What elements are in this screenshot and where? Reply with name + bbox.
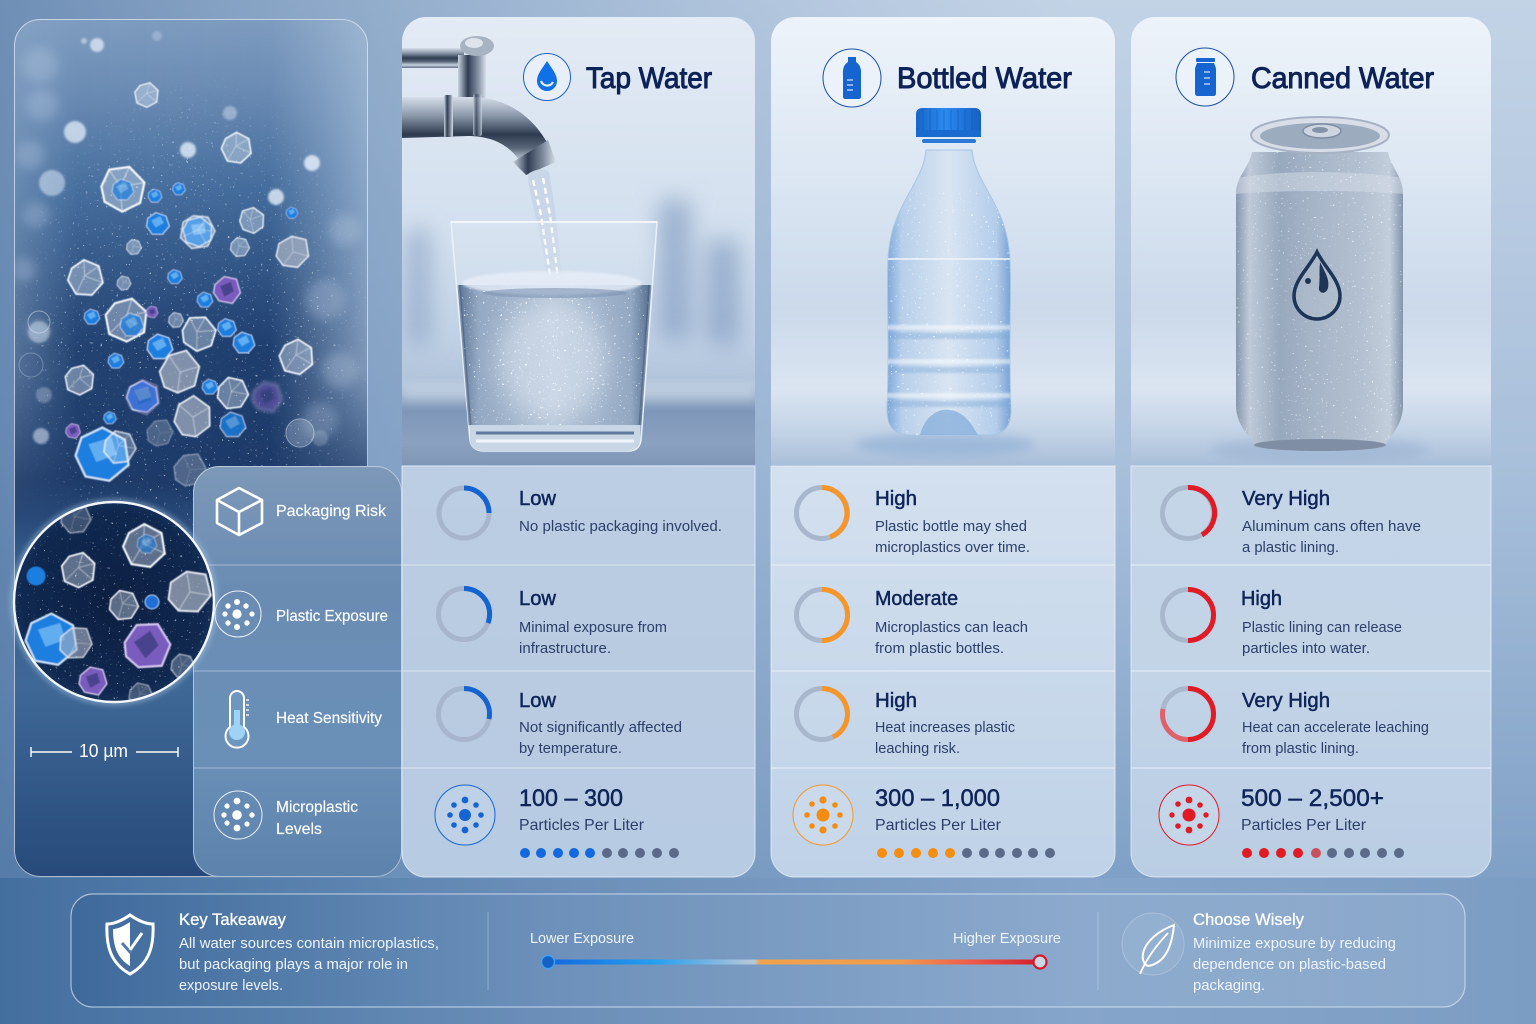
tap: packaging risk xyxy=(439,488,722,538)
panel: microplastic particles xyxy=(12,19,368,877)
tap: plastic exposure: infrastructure. xyxy=(519,640,611,657)
tap: plastic exposure xyxy=(438,588,667,657)
tap: packaging risk: Low xyxy=(519,488,557,510)
tap: heat sensitivity: Low xyxy=(519,690,557,712)
canned: plastic exposure: Plastic lining can release xyxy=(1242,619,1402,636)
icon: shield xyxy=(107,915,153,974)
label: packaging risk: Packaging Risk xyxy=(276,503,387,520)
tap: heat sensitivity xyxy=(438,688,682,757)
canned: heat sensitivity: from plastic lining. xyxy=(1242,740,1359,757)
choose wisely: dependence on plastic-based xyxy=(1193,956,1386,973)
choose wisely: Minimize exposure by reducing xyxy=(1193,935,1396,952)
scale bar: 10 micrometres: 10 µm xyxy=(79,741,128,761)
canned: microplastic levels xyxy=(1159,785,1404,858)
bottled: heat sensitivity xyxy=(796,688,1015,757)
bottled: microplastic levels: 300 – 1,000 xyxy=(875,785,1000,812)
label: packaging risk xyxy=(217,488,387,535)
label: microplastic levels xyxy=(214,791,358,839)
exposure gradient scale xyxy=(530,930,1061,968)
key takeaway xyxy=(107,910,439,994)
tap: heat sensitivity: by temperature. xyxy=(519,740,622,757)
canned: packaging risk: Aluminum cans often have xyxy=(1242,518,1421,535)
table column: bottled water xyxy=(771,466,1115,877)
bottled: heat sensitivity: Heat increases plastic xyxy=(875,719,1015,736)
bottled: microplastic levels xyxy=(793,785,1055,858)
canned: packaging risk: Very High xyxy=(1242,488,1330,510)
bottled: plastic exposure xyxy=(796,588,1028,657)
canned: microplastic levels: Particles Per Liter xyxy=(1241,817,1367,834)
label: plastic exposure: Plastic Exposure xyxy=(276,608,388,625)
choose wisely xyxy=(1122,910,1396,994)
label: heat sensitivity: Heat Sensitivity xyxy=(276,710,382,727)
canned: heat sensitivity xyxy=(1162,688,1429,757)
exposure gradient scale: Higher Exposure xyxy=(953,930,1061,947)
photo: tap and glass xyxy=(402,36,755,451)
choose wisely: packaging. xyxy=(1193,977,1265,994)
tap: plastic exposure: Low xyxy=(519,588,557,610)
bottled: plastic exposure: Microplastics can leach xyxy=(875,619,1028,636)
panel: tap water xyxy=(402,17,755,465)
label: microplastic levels: Levels xyxy=(276,821,322,838)
glass of water xyxy=(451,222,657,451)
photo: plastic bottle xyxy=(855,108,1035,457)
label: plastic exposure xyxy=(215,591,388,637)
tap: microplastic levels xyxy=(435,785,679,858)
tap: microplastic levels: 100 – 300 xyxy=(519,785,623,812)
icon: can xyxy=(1176,48,1234,106)
choose wisely: Choose Wisely xyxy=(1193,910,1304,929)
key takeaway: Key Takeaway xyxy=(179,910,286,929)
label: microplastic levels: Microplastic xyxy=(276,799,358,816)
bottled: packaging risk: Plastic bottle may shed xyxy=(875,518,1027,535)
table column: tap water xyxy=(402,466,755,877)
tap: microplastic levels: Particles Per Liter xyxy=(519,817,645,834)
bottled: packaging risk: High xyxy=(875,488,917,510)
canned: microplastic levels: 500 – 2,500+ xyxy=(1241,785,1384,812)
microplastic fragments xyxy=(60,79,319,486)
panel: row labels xyxy=(193,466,402,877)
canned: plastic exposure xyxy=(1162,588,1402,657)
panel: canned water xyxy=(1131,17,1491,465)
canned: plastic exposure: particles into water. xyxy=(1242,640,1370,657)
bottled: packaging risk xyxy=(796,488,1030,556)
bottled: plastic exposure: from plastic bottles. xyxy=(875,640,1004,657)
photo: aluminum can xyxy=(1210,117,1430,463)
bottled: plastic exposure: Moderate xyxy=(875,588,958,610)
key takeaway: exposure levels. xyxy=(179,977,283,994)
faucet xyxy=(402,36,556,175)
key takeaway: All water sources contain microplastics, xyxy=(179,935,439,952)
panel: bottled water xyxy=(771,17,1115,465)
exposure gradient scale: Lower Exposure xyxy=(530,930,634,947)
water stream xyxy=(528,170,558,236)
canned: packaging risk: a plastic lining. xyxy=(1242,539,1339,556)
table column: canned water xyxy=(1131,466,1491,877)
canned: heat sensitivity: Heat can accelerate leaching xyxy=(1242,719,1429,736)
can droplet emblem xyxy=(1294,252,1340,319)
icon: bottle xyxy=(823,49,881,107)
canned: heat sensitivity: Very High xyxy=(1242,690,1330,712)
bottled: microplastic levels: Particles Per Liter xyxy=(875,817,1002,834)
icon: leaf xyxy=(1122,913,1184,975)
tap: heat sensitivity: Not significantly affected xyxy=(519,719,682,736)
panel: bottom summary bar xyxy=(71,894,1465,1007)
bottled: packaging risk: microplastics over time. xyxy=(875,539,1030,556)
key takeaway: but packaging plays a major role in xyxy=(179,956,408,973)
tap: plastic exposure: Minimal exposure from xyxy=(519,619,667,636)
scale bar: 10 micrometres xyxy=(31,741,178,761)
heading: tap water: Tap Water xyxy=(586,62,712,95)
label: heat sensitivity xyxy=(226,691,382,748)
tap: packaging risk: No plastic packaging involved. xyxy=(519,518,722,535)
particle field background xyxy=(12,19,368,877)
heading: bottled water: Bottled Water xyxy=(897,62,1072,95)
bottled: heat sensitivity: leaching risk. xyxy=(875,740,960,757)
icon: water drop xyxy=(524,54,570,100)
bottled: heat sensitivity: High xyxy=(875,690,917,712)
heading: canned water: Canned Water xyxy=(1251,62,1434,95)
magnified particle view xyxy=(10,498,218,707)
canned: packaging risk xyxy=(1162,487,1421,556)
canned: plastic exposure: High xyxy=(1241,588,1282,610)
